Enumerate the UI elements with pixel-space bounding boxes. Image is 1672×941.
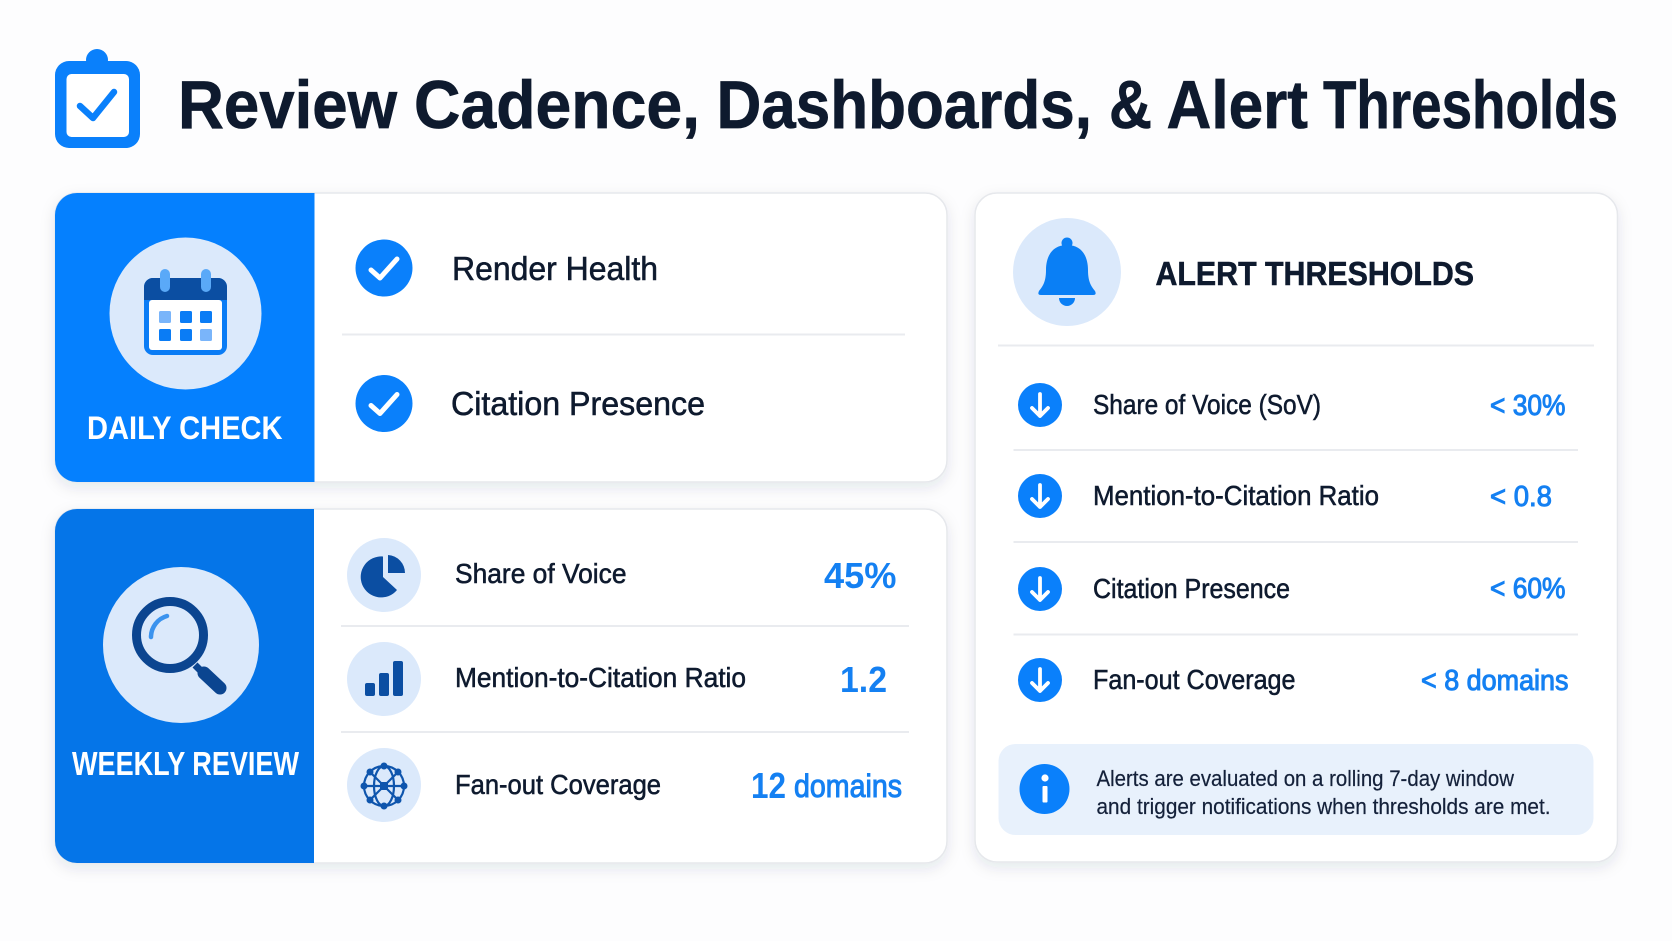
title: Dashboards, [716,67,1092,143]
arrow icon: citation presence [1018,567,1062,611]
threshold: under 8 domains: < 8 domains [1421,665,1568,697]
arrow icon: fan-out coverage [1018,658,1062,702]
daily check blue sidebar [55,193,314,482]
title: Review [178,67,398,143]
icon: magnifying glass [103,567,259,723]
callout: evaluation note [998,744,1594,835]
value: 12 domains [751,765,902,806]
panel: alert thresholds [975,193,1618,862]
icon: network globe [347,748,421,822]
icon: calendar [110,238,262,390]
arrow icon: share of voice [1018,383,1062,427]
label: fan-out coverage: Fan-out Coverage [1093,664,1296,695]
icon: info [1020,764,1070,814]
label: render health: Render Health [452,250,658,287]
note text [1096,766,1550,819]
threshold: under 60%: < 60% [1490,573,1566,605]
check icon: render health [356,240,412,296]
check icon: citation presence [356,375,412,432]
panel: daily check [55,193,947,482]
label: mention-to-citation ratio: Mention-to-Citation Ratio [1093,480,1379,511]
daily check heading: DAILY CHECK [87,410,282,446]
alert thresholds heading: ALERT THRESHOLDS [1156,255,1474,292]
value: 45%: 45% [824,555,896,596]
label: mention-to-citation ratio: Mention-to-Citation Ratio [455,662,746,693]
label: citation presence: Citation Presence [1093,573,1290,604]
value: 1.2: 1.2 [840,659,887,700]
title: Alert [1166,67,1308,143]
value: 12 domains: domains [794,768,902,804]
threshold: under 0.8: < 0.8 [1490,481,1552,513]
note text: Alerts are evaluated on a rolling 7-day window [1096,766,1514,791]
icon: clipboard with check [55,49,140,148]
icon: bar chart [347,642,421,716]
title [178,67,1618,143]
label: share of voice: Share of Voice [455,558,626,589]
panel: weekly review [55,509,947,863]
weekly review heading: WEEKLY REVIEW [72,745,300,782]
weekly review blue sidebar [55,509,314,863]
label: share of voice sov: Share of Voice (SoV) [1093,389,1321,420]
icon: pie chart [347,538,421,612]
value: 12 domains: 12 [751,765,786,806]
title: Cadence, [414,67,700,143]
label: fan-out coverage: Fan-out Coverage [455,769,661,800]
arrow icon: mention ratio [1018,474,1062,518]
icon: bell [1013,218,1121,326]
title: & [1109,67,1152,143]
label: citation presence: Citation Presence [451,385,705,422]
note text: and trigger notifications when thresholds are met. [1096,794,1550,819]
threshold: under 30%: < 30% [1490,390,1566,422]
